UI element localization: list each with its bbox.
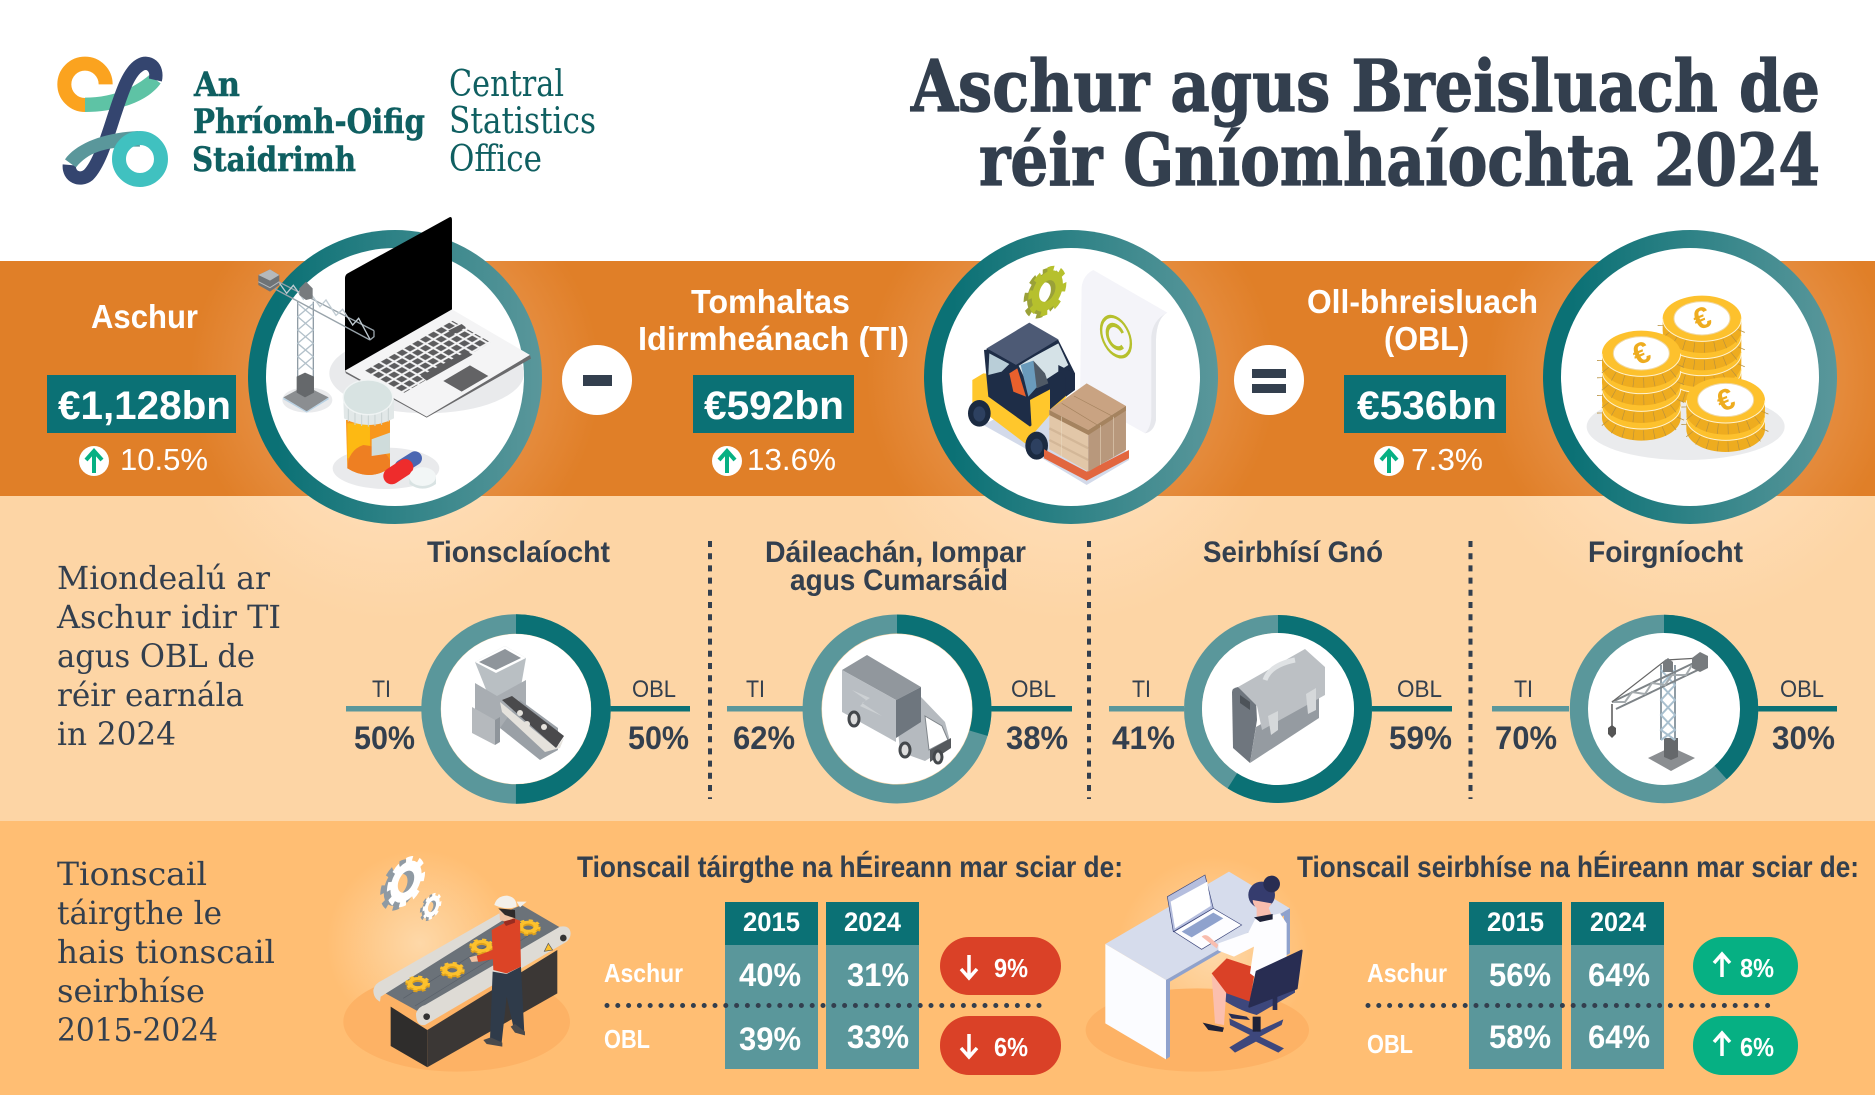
- icon: delivery truck: [842, 655, 951, 763]
- heading: Tionsclaíocht: Tionsclaíocht: [427, 536, 610, 569]
- background: bottom band: [0, 821, 1875, 1095]
- icon: woman working at desk: [1086, 857, 1310, 1072]
- change: up 10.5%: 10.5%: [120, 442, 208, 477]
- badge: down 9%: 9%: [994, 953, 1028, 983]
- table text: 2024: [844, 907, 901, 937]
- heading: Foirgníocht: Foirgníocht: [1588, 536, 1743, 569]
- panel: Tionsclaíocht donut: [346, 536, 690, 794]
- donut chart: 50/50: [431, 624, 601, 794]
- values: TI 41%, OBL 59%: [1112, 676, 1452, 756]
- text: manufacturing vs services description: 2015-2024: [57, 1011, 218, 1049]
- values: TI 41%, OBL 59%: 41%: [1112, 720, 1175, 756]
- icon: worker at conveyor belt: [327, 850, 571, 1072]
- table text: 31%: [847, 957, 909, 993]
- panel: Dáileachán donut: [727, 536, 1072, 794]
- values: TI 50%, OBL 50%: TI: [372, 676, 391, 703]
- badge: down 9%: [940, 937, 1061, 995]
- values: TI 41%, OBL 59%: TI: [1132, 676, 1151, 703]
- coin stack: left: €: [1628, 335, 1656, 372]
- coin stack: left: [1602, 331, 1681, 441]
- heading: manufacturing share: Tionscail táirgthe na hÉireann mar sciar de:: [577, 850, 1123, 884]
- logo text: English name: [449, 64, 596, 180]
- title: [910, 44, 1820, 202]
- coin stack: back: €: [1688, 300, 1716, 337]
- text: manufacturing vs services description: seirbhíse: [57, 972, 205, 1010]
- crane jib: [258, 269, 374, 340]
- heading: Dáileachán, Iompar agus Cumarsáid: agus Cumarsáid: [790, 564, 1008, 597]
- table text: Aschur: [1367, 958, 1447, 988]
- table text: 58%: [1489, 1019, 1551, 1055]
- background: light breakdown band: [0, 496, 1875, 821]
- row separator: [1368, 1003, 1768, 1008]
- panel: Aschur figures: [47, 298, 236, 477]
- change: up 7.3%: 7.3%: [1411, 442, 1483, 477]
- logo text: English name: Office: [449, 139, 542, 180]
- heading: Tomhaltas Idirmheánach (TI): [638, 283, 909, 357]
- table columns: [1469, 902, 1664, 1069]
- ring: output circle: [248, 230, 542, 524]
- text: manufacturing vs services description: Tionscail: [57, 855, 207, 893]
- value box: gross value added: €536bn: [1357, 384, 1497, 428]
- table text: 39%: [739, 1021, 801, 1057]
- values: TI 41%, OBL 59%: 59%: [1389, 720, 1452, 756]
- badge: up 8%: [1693, 937, 1798, 995]
- change: up 10.5%: [79, 442, 208, 477]
- values: TI 70%, OBL 30%: [1495, 676, 1835, 756]
- table text: 2015: [743, 907, 800, 937]
- panel: Tomhaltas Idirmheánach figures: [638, 283, 909, 477]
- connector lines: [346, 706, 690, 712]
- text: manufacturing vs services description: táirgthe le: [57, 894, 222, 932]
- values: TI 62%, OBL 38%: TI: [746, 676, 765, 703]
- table text: 40%: [739, 957, 801, 993]
- logo text: Irish name: An: [193, 65, 240, 105]
- values: TI 50%, OBL 50%: OBL: [632, 676, 676, 703]
- values: TI 70%, OBL 30%: OBL: [1780, 676, 1824, 703]
- text: manufacturing vs services description: [57, 855, 275, 1049]
- table columns: [725, 902, 919, 1069]
- value box: output: €1,128bn: [58, 384, 231, 428]
- values: TI 70%, OBL 30%: 70%: [1495, 720, 1557, 756]
- table text: OBL: [1367, 1029, 1413, 1059]
- heading: Oll-bhreisluach (OBL): (OBL): [1384, 320, 1469, 357]
- values: TI 41%, OBL 59%: OBL: [1397, 676, 1442, 703]
- values: TI 70%, OBL 30%: TI: [1514, 676, 1533, 703]
- icon: crane, laptop and medicine: [258, 217, 531, 489]
- icon: industrial machine: [472, 646, 564, 760]
- change: up 7.3%: [1374, 442, 1483, 477]
- row separator: [607, 1003, 1047, 1008]
- heading: Oll-bhreisluach (OBL): Oll-bhreisluach: [1307, 283, 1538, 320]
- table text: 64%: [1588, 957, 1650, 993]
- values: TI 70%, OBL 30%: 30%: [1772, 720, 1835, 756]
- icon: forklift, gear and copyright document: [968, 262, 1167, 485]
- background: orange formula band: [0, 261, 1875, 496]
- table text: [1367, 907, 1650, 1059]
- panel: Seirbhísí Gnó donut: [1109, 536, 1452, 794]
- table: manufacturing shares: [604, 902, 1061, 1075]
- logo text: English name: Central: [449, 64, 564, 105]
- panel: Oll-bhreisluach figures: [1307, 283, 1538, 477]
- icon: equals operator: [1234, 345, 1304, 415]
- icon: stacks of euro coins: [1587, 296, 1785, 460]
- values: TI 50%, OBL 50%: [354, 676, 689, 756]
- heading: Oll-bhreisluach (OBL): [1307, 283, 1538, 357]
- donut chart: 41/59: [1193, 624, 1363, 794]
- badge: up 6%: [1693, 1016, 1798, 1075]
- value box: gross value added: [1344, 375, 1506, 433]
- text: breakdown description: réir earnála: [57, 676, 244, 714]
- values: TI 62%, OBL 38%: 62%: [733, 720, 795, 756]
- table text: Aschur: [604, 958, 683, 988]
- background: white header: [0, 0, 1875, 261]
- table text: OBL: [604, 1024, 650, 1054]
- values: TI 50%, OBL 50%: 50%: [354, 720, 415, 756]
- table: services shares: [1367, 902, 1798, 1075]
- heading: Tomhaltas Idirmheánach (TI): Idirmheánach (TI): [638, 320, 909, 357]
- logo text: English name: Statistics: [449, 101, 596, 142]
- heading: Aschur: Aschur: [91, 298, 198, 335]
- coin stack: front: [1686, 377, 1765, 452]
- icon: minus operator: [562, 345, 632, 415]
- heading: Dáileachán, Iompar agus Cumarsáid: Dáileachán, Iompar: [765, 536, 1026, 569]
- heading: Seirbhísí Gnó: Seirbhísí Gnó: [1203, 536, 1383, 569]
- logo text: Irish name: [192, 65, 425, 180]
- text: breakdown description: [56, 559, 281, 753]
- values: TI 62%, OBL 38%: [733, 676, 1068, 756]
- table text: [604, 907, 909, 1057]
- logo text: Irish name: Phríomh-Oifig: [193, 102, 425, 142]
- badge: up 8%: 8%: [1740, 953, 1774, 983]
- ring: gross value added circle: [1543, 230, 1837, 524]
- heading: Dáileachán, Iompar agus Cumarsáid: [765, 536, 1026, 597]
- logo text: Irish name: Staidrimh: [192, 140, 356, 180]
- table text: 64%: [1588, 1019, 1650, 1055]
- text: breakdown description: agus OBL de: [57, 637, 255, 675]
- value box: output: [47, 375, 236, 433]
- panel: Foirgníocht donut: [1492, 536, 1837, 794]
- connector lines: [1492, 706, 1837, 712]
- text: breakdown description: Miondealú ar: [57, 559, 271, 597]
- coin stack: back: [1663, 296, 1741, 405]
- badge: up 6%: 6%: [1740, 1032, 1774, 1062]
- table text: 56%: [1489, 957, 1551, 993]
- divider dots: [710, 541, 1470, 799]
- values: TI 62%, OBL 38%: OBL: [1011, 676, 1056, 703]
- icon: briefcase: [1232, 649, 1325, 763]
- heading: Tomhaltas Idirmheánach (TI): Tomhaltas: [691, 283, 850, 320]
- connector lines: [727, 706, 1072, 712]
- text: breakdown description: in 2024: [57, 715, 176, 753]
- values: TI 50%, OBL 50%: 50%: [628, 720, 689, 756]
- donut chart: 62/38: [812, 624, 982, 794]
- icon: tower crane: [1608, 652, 1708, 771]
- table text: 2015: [1487, 907, 1544, 937]
- donut chart: 70/30: [1579, 624, 1749, 794]
- coin stack: front: €: [1712, 382, 1740, 419]
- table text: 33%: [847, 1019, 909, 1055]
- value box: intermediate consumption: [693, 375, 854, 433]
- text: manufacturing vs services description: hais tionscail: [57, 933, 275, 971]
- table text: 2024: [1590, 907, 1646, 937]
- badge: down 6%: 6%: [994, 1032, 1028, 1062]
- values: TI 62%, OBL 38%: 38%: [1006, 720, 1068, 756]
- connector lines: [1109, 706, 1452, 712]
- ring: intermediate consumption circle: [924, 230, 1218, 524]
- change: up 13.6%: 13.6%: [747, 442, 836, 477]
- logo: Central Statistics Office mark: [64, 63, 161, 180]
- value box: intermediate consumption: €592bn: [704, 384, 844, 428]
- badge: down 6%: [940, 1016, 1061, 1075]
- text: breakdown description: Aschur idir TI: [56, 598, 281, 636]
